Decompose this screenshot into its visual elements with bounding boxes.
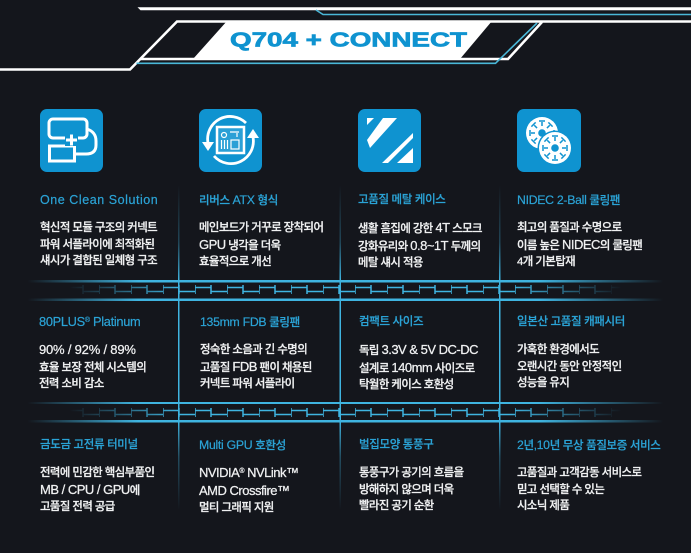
body text: 메탈 섀시 적용 [358,257,423,269]
icon: reverse ATX board [199,109,262,172]
body text: 혁신적 모듈 구조의 커넥트 [40,222,157,234]
body text: 4개 기본탑재 [517,256,575,268]
heading: Multi GPU 호환성 [199,438,286,452]
body text [359,466,464,512]
heading: 2년,10년 무상 품질보증 서비스 [517,438,661,452]
body text: 통풍구가 공기의 흐름을 [359,467,464,479]
heading: 135mm FDB 쿨링팬 [200,315,300,329]
heading: NIDEC 2-Ball 쿨링팬 [517,193,620,207]
icon: twin fans [517,109,581,172]
body text: AMD Crossfire™ [199,483,290,498]
body text [199,221,323,268]
body text [198,465,299,514]
body text [39,342,146,390]
card: metal case [358,109,482,269]
card: honeycomb vent [359,438,464,512]
heading: 컴팩트 사이즈 [359,316,423,328]
card: warranty [517,438,661,512]
body text [40,466,154,513]
body text: 탁월한 케이스 호환성 [359,379,454,391]
body text: 믿고 선택할 수 있는 [517,484,604,496]
body text [517,221,642,268]
body text: 가혹한 환경에서도 [517,344,599,356]
card: reverse ATX [199,109,323,268]
body text [40,221,158,267]
heading: 일본산 고품질 캐패시터 [517,316,625,328]
body text: 이름 높은 NIDEC의 쿨링팬 [517,237,642,252]
body text [358,220,482,269]
body text: 시소닉 제품 [517,500,569,512]
body text: 메인보드가 거꾸로 장착되어 [199,222,323,234]
body text [359,342,478,391]
heading: One Clean Solution [40,193,158,207]
body text: 빨라진 공기 순환 [359,500,434,512]
title banner [0,7,691,71]
heading: 금도금 고전류 터미널 [40,439,138,451]
body text: 고품질 전력 공급 [40,501,115,513]
body text: 오랜시간 동안 안정적인 [517,361,622,373]
card: One Clean Solution [40,109,158,267]
card: FDB fan [200,315,312,390]
body text: GPU 냉각을 더욱 [199,237,281,252]
body text: 커넥트 파워 서플라이 [200,378,295,390]
body text: 최고의 품질과 수명으로 [517,222,622,234]
title banner: Q704 + CONNECT [230,30,467,52]
heading: 벌집모양 통풍구 [359,439,433,451]
body text: 고품질 FDB 팬이 채용된 [200,359,312,374]
body text: 파워 서플라이에 최적화된 [40,239,154,251]
card: gold terminal [40,438,154,513]
icon: modular power [40,109,103,172]
body text [517,466,642,512]
body text: MB / CPU / GPU에 [40,482,140,497]
heading: 리버스 ATX 형식 [199,193,278,207]
card: capacitor [517,315,625,389]
body text: 효율 보장 전체 시스템의 [39,362,146,374]
body text: NVIDIA® NVLink™ [199,465,299,480]
card: 80PLUS [39,314,146,390]
body text: 정숙한 소음과 긴 수명의 [200,344,307,356]
card: NIDEC fans [517,109,642,268]
icon: metal case glass [358,109,421,172]
body text: 독립 3.3V & 5V DC-DC [359,342,478,357]
body text [517,343,622,389]
body text: 섀시가 결합된 일체형 구조 [40,255,157,267]
body text: 전력 소비 감소 [39,378,104,390]
card: compact size [359,315,478,391]
background and grid lines [32,193,658,504]
body text: 강화유리와 0.8~1T 두께의 [358,238,481,253]
body text: 설계로 140mm 사이즈로 [359,360,475,375]
body text: 90% / 92% / 89% [39,342,136,357]
body text: 전력에 민감한 핵심부품인 [40,467,154,479]
body text: 생활 흠집에 강한 4T 스모크 [358,220,482,235]
body text: 방해하지 않으며 더욱 [359,484,454,496]
heading: 고품질 메탈 케이스 [358,194,446,206]
body text: 고품질과 고객감동 서비스로 [517,467,641,479]
card: multi GPU [198,438,299,514]
body text: 멀티 그래픽 지원 [199,502,274,514]
body text [200,343,312,390]
heading: 80PLUS® Platinum [39,314,140,329]
body text: 성능을 유지 [517,377,569,389]
body text: 효율적으로 개선 [199,256,271,268]
